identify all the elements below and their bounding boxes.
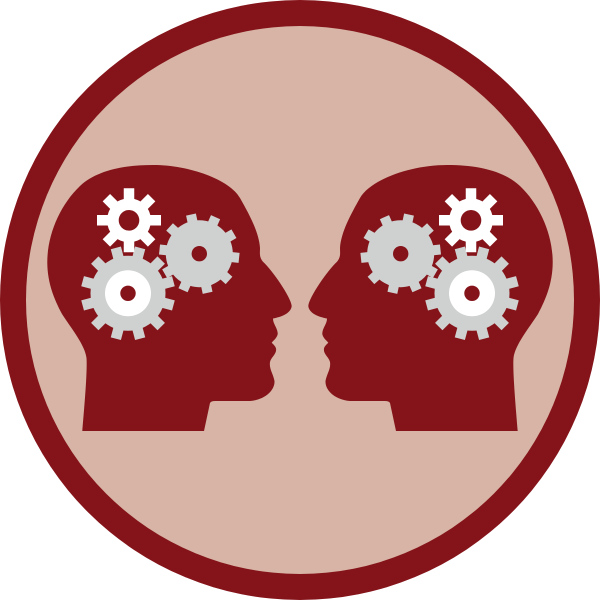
right head with gears <box>308 165 553 431</box>
left head with gears <box>47 165 292 431</box>
